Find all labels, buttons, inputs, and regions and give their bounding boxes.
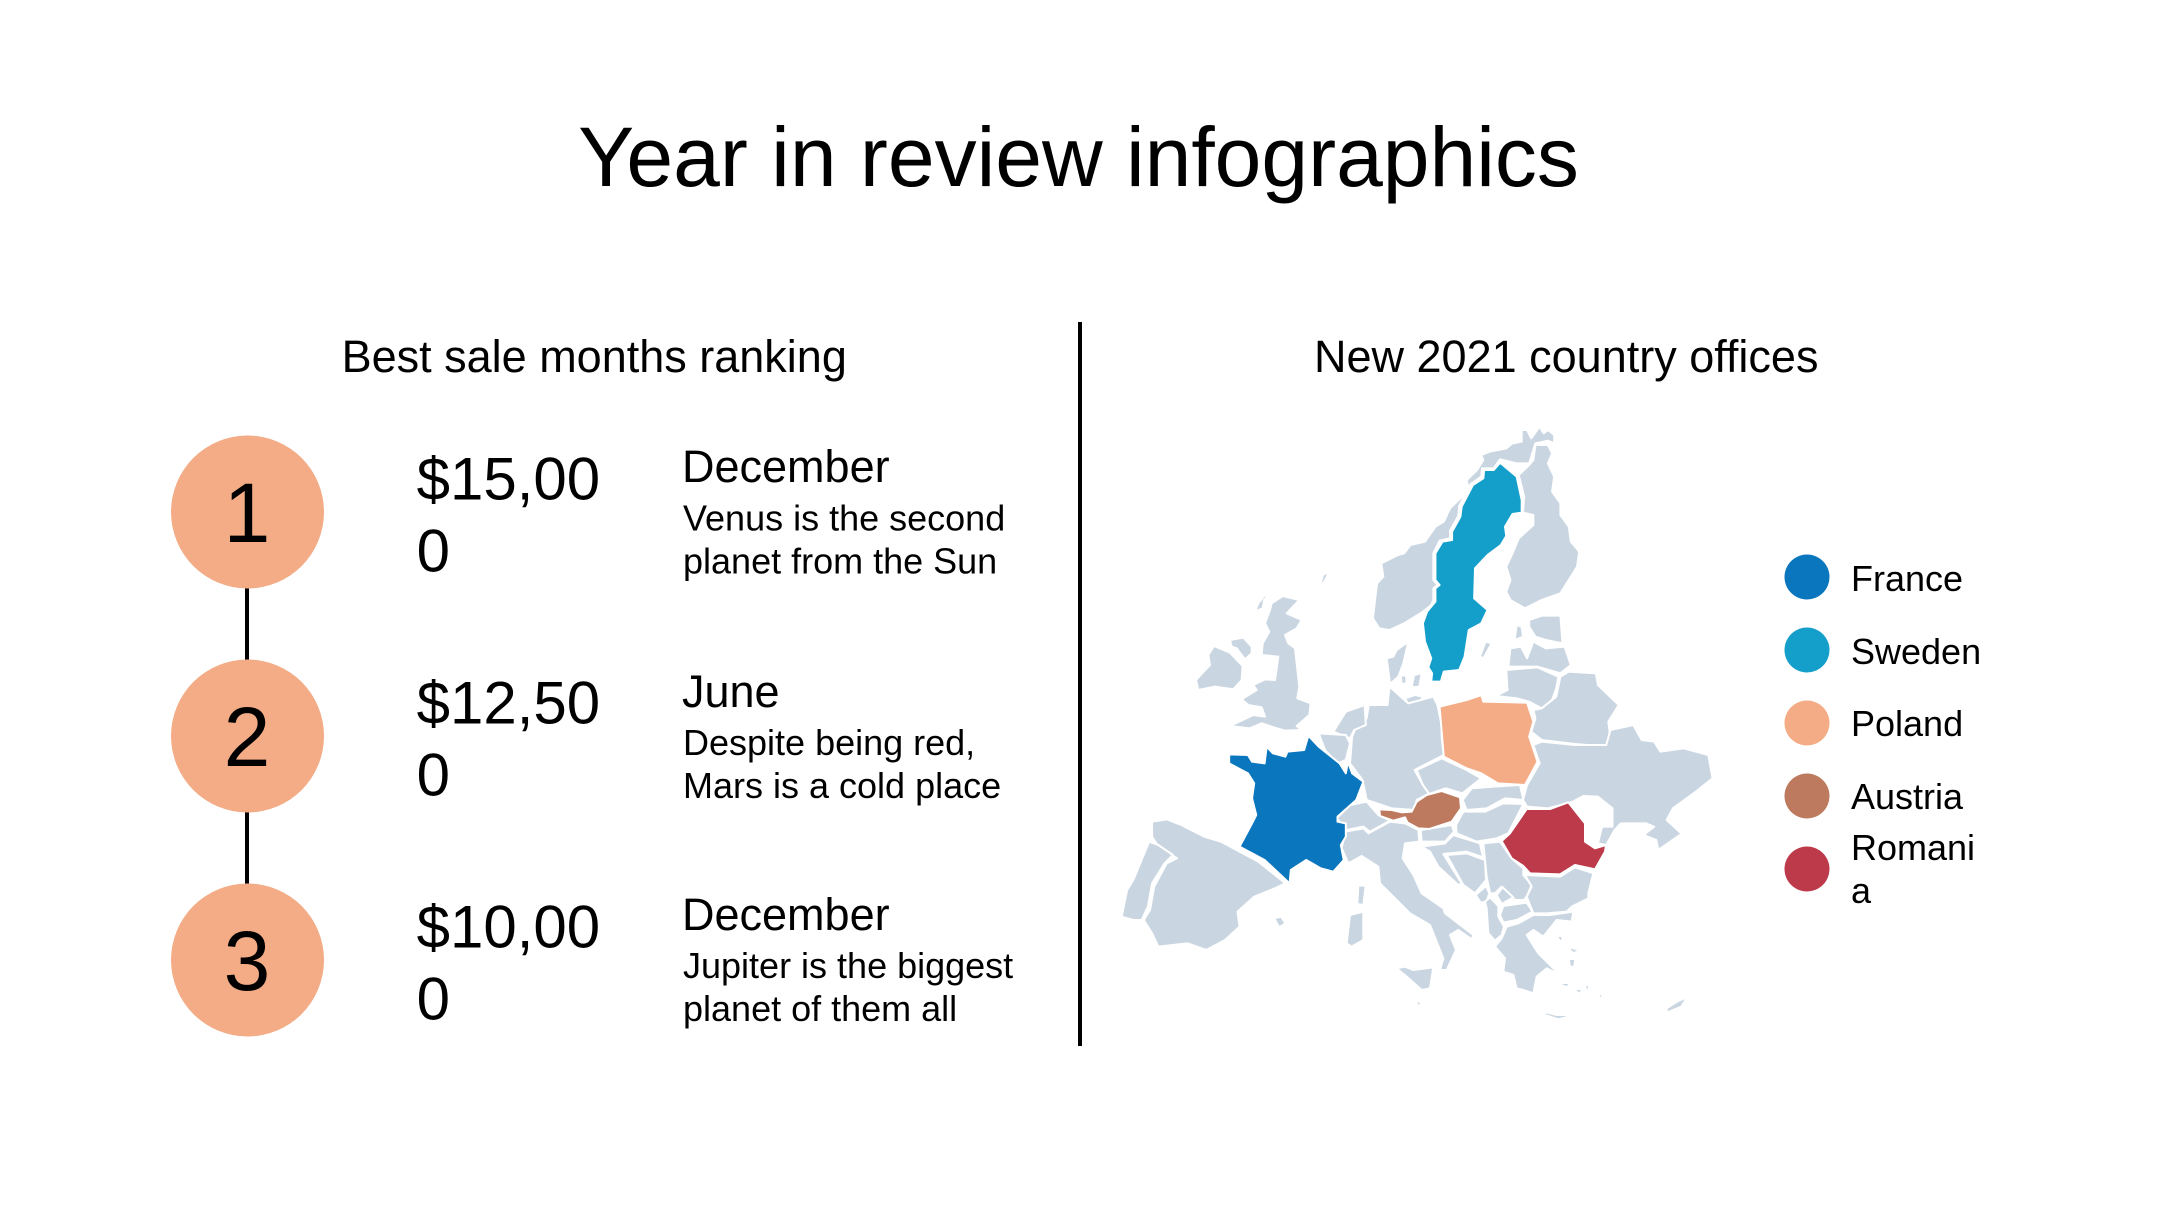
legend: Austria: Austria bbox=[1851, 776, 1964, 817]
rank 3: 0 bbox=[417, 966, 450, 1032]
legend: Romania bbox=[1784, 827, 1975, 911]
country: Sweden bbox=[1423, 463, 1522, 682]
connector between circles 1 and 2 bbox=[245, 588, 249, 662]
small islands bbox=[1417, 937, 1588, 1005]
connector between circles 2 and 3 bbox=[245, 812, 249, 886]
rank 2: Despite being red, bbox=[683, 722, 975, 763]
rank 3: planet of them all bbox=[683, 988, 957, 1029]
british isles and denmark bbox=[1196, 594, 1423, 731]
rank 1: 0 bbox=[417, 518, 450, 584]
rank 1: planet from the Sun bbox=[683, 540, 997, 582]
country: Poland bbox=[1440, 695, 1538, 785]
legend: Romania: Romani bbox=[1851, 827, 1975, 868]
rank 1: Venus is the second bbox=[683, 498, 1005, 538]
country: France bbox=[1229, 736, 1363, 883]
legend: France bbox=[1784, 554, 1963, 600]
rank 2: June bbox=[682, 666, 780, 717]
map of europe bbox=[1122, 427, 1713, 1019]
northern countries bbox=[1321, 427, 1579, 708]
country: Austria bbox=[1379, 791, 1461, 829]
rank 2: Mars is a cold place bbox=[683, 765, 1001, 806]
alpine, italian and balkan countries bbox=[1337, 785, 1604, 1019]
rank 3: 3 bbox=[224, 914, 270, 1008]
rank 1: December bbox=[682, 441, 890, 492]
rank 2: 2 bbox=[224, 690, 270, 784]
central and western countries bbox=[1122, 672, 1713, 1013]
rank 2 bbox=[171, 660, 1001, 812]
legend: Sweden: Sweden bbox=[1851, 631, 1981, 672]
rank 1: $15,00 bbox=[417, 446, 600, 512]
heading: best sale months ranking: Best sale months ranking bbox=[342, 331, 847, 382]
legend: Romania: a bbox=[1851, 870, 1872, 911]
legend: Poland bbox=[1784, 700, 1963, 746]
panel: ranking bbox=[171, 436, 1013, 1036]
legend: France: France bbox=[1851, 558, 1963, 599]
country: Romania bbox=[1502, 802, 1606, 874]
legend bbox=[1784, 554, 1981, 911]
legend: Poland: Poland bbox=[1851, 703, 1963, 744]
title: Year in review infographics bbox=[578, 110, 1579, 204]
rank 3: December bbox=[682, 889, 890, 940]
rank 2: 0 bbox=[417, 742, 450, 808]
rank 1: 1 bbox=[224, 466, 270, 560]
rank 1 bbox=[171, 436, 1005, 588]
rank 2: $12,50 bbox=[417, 670, 600, 736]
heading: new 2021 country offices: New 2021 country offices bbox=[1314, 331, 1818, 382]
legend: Austria bbox=[1784, 774, 1964, 818]
vertical divider bbox=[1078, 322, 1082, 1046]
rank 3: Jupiter is the biggest bbox=[683, 945, 1013, 986]
rank 3 bbox=[171, 884, 1013, 1036]
legend: Sweden bbox=[1784, 628, 1981, 672]
rank 3: $10,00 bbox=[417, 894, 600, 960]
